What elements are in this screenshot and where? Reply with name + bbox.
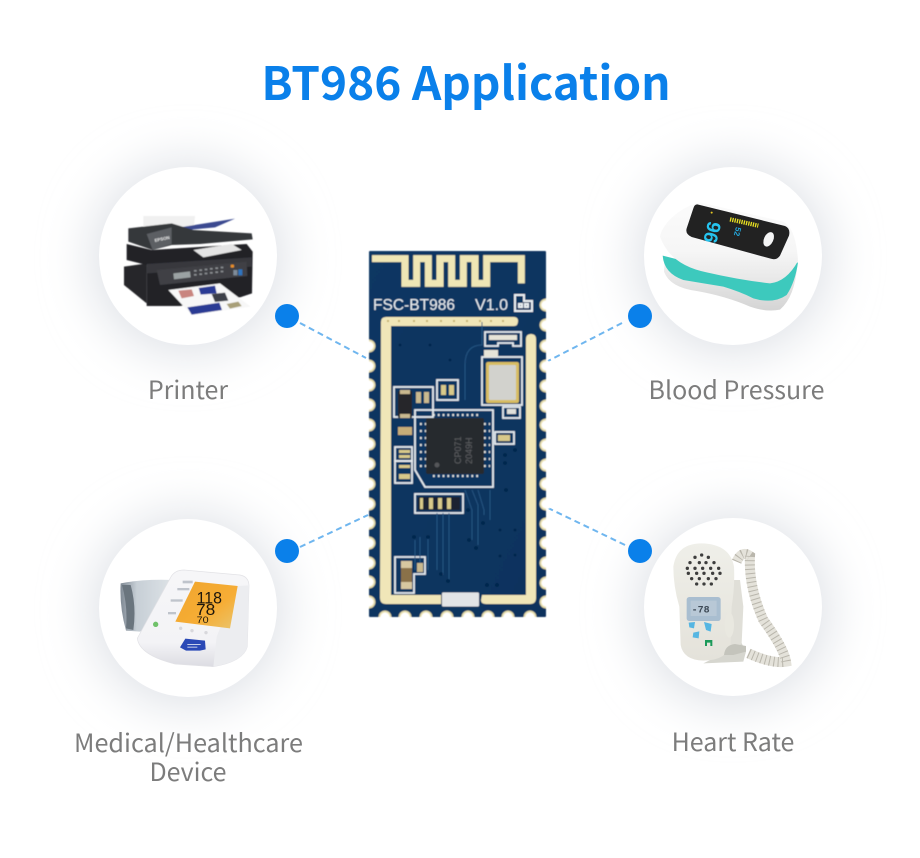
silkscreen logo bbox=[515, 295, 532, 311]
label: Printer: Printer bbox=[148, 371, 228, 407]
SMD components bbox=[398, 335, 517, 589]
icon: finger pulse oximeter: 96 bbox=[698, 219, 724, 245]
panel: medical/healthcare bbox=[99, 519, 277, 697]
icon: finger pulse oximeter: 52 bbox=[732, 226, 743, 238]
panel: heart rate bbox=[644, 518, 822, 696]
QFN chip bbox=[420, 415, 490, 476]
circuit traces bbox=[415, 322, 490, 580]
icon: blood pressure monitor: 70 bbox=[197, 615, 209, 625]
ground frame bbox=[380, 317, 536, 604]
label: Blood Pressure: Blood Pressure bbox=[649, 371, 824, 407]
connector: printer bbox=[275, 304, 366, 358]
panel: circle halos bbox=[90, 160, 831, 708]
connector: medical bbox=[275, 515, 368, 563]
QFN chip: CP071 bbox=[453, 436, 463, 464]
silkscreen outlines bbox=[394, 332, 522, 593]
icon: blood pressure monitor bbox=[120, 570, 249, 667]
silkscreen label: V1.0: V1.0 bbox=[475, 297, 508, 314]
icon: finger pulse oximeter bbox=[660, 202, 798, 311]
frame vias bbox=[387, 320, 504, 322]
PCB board bbox=[364, 251, 552, 622]
label: Heart Rate: Heart Rate bbox=[672, 723, 794, 759]
QFN chip: 2049H bbox=[464, 437, 474, 464]
shield tab bbox=[442, 592, 479, 606]
label: Medical/Healthcare Device: Medical/Healthcare bbox=[74, 724, 303, 760]
icon: blood pressure monitor: 118 bbox=[197, 588, 222, 607]
panel: printer bbox=[99, 167, 277, 345]
connector: blood pressure bbox=[548, 304, 652, 361]
panel: blood pressure bbox=[644, 167, 822, 345]
icon: blood pressure monitor: 78 bbox=[196, 602, 215, 619]
connector: heart rate bbox=[548, 508, 652, 563]
icon: printer: EPSON bbox=[154, 235, 170, 243]
icon: fetal doppler heart rate monitor: -78 bbox=[692, 605, 710, 616]
icon: printer bbox=[124, 216, 253, 315]
icon: fetal doppler heart rate monitor bbox=[673, 543, 786, 663]
title: BT986 Application bbox=[261, 48, 671, 114]
crystal bbox=[486, 362, 519, 403]
label: Medical/Healthcare Device bbox=[74, 724, 303, 789]
antenna trace bbox=[372, 259, 521, 283]
panel: BT986 PCB module bbox=[364, 251, 552, 622]
label: Medical/Healthcare Device: Device bbox=[149, 753, 227, 789]
vias bbox=[398, 344, 517, 587]
silkscreen label: FSC-BT986: FSC-BT986 bbox=[373, 297, 455, 314]
